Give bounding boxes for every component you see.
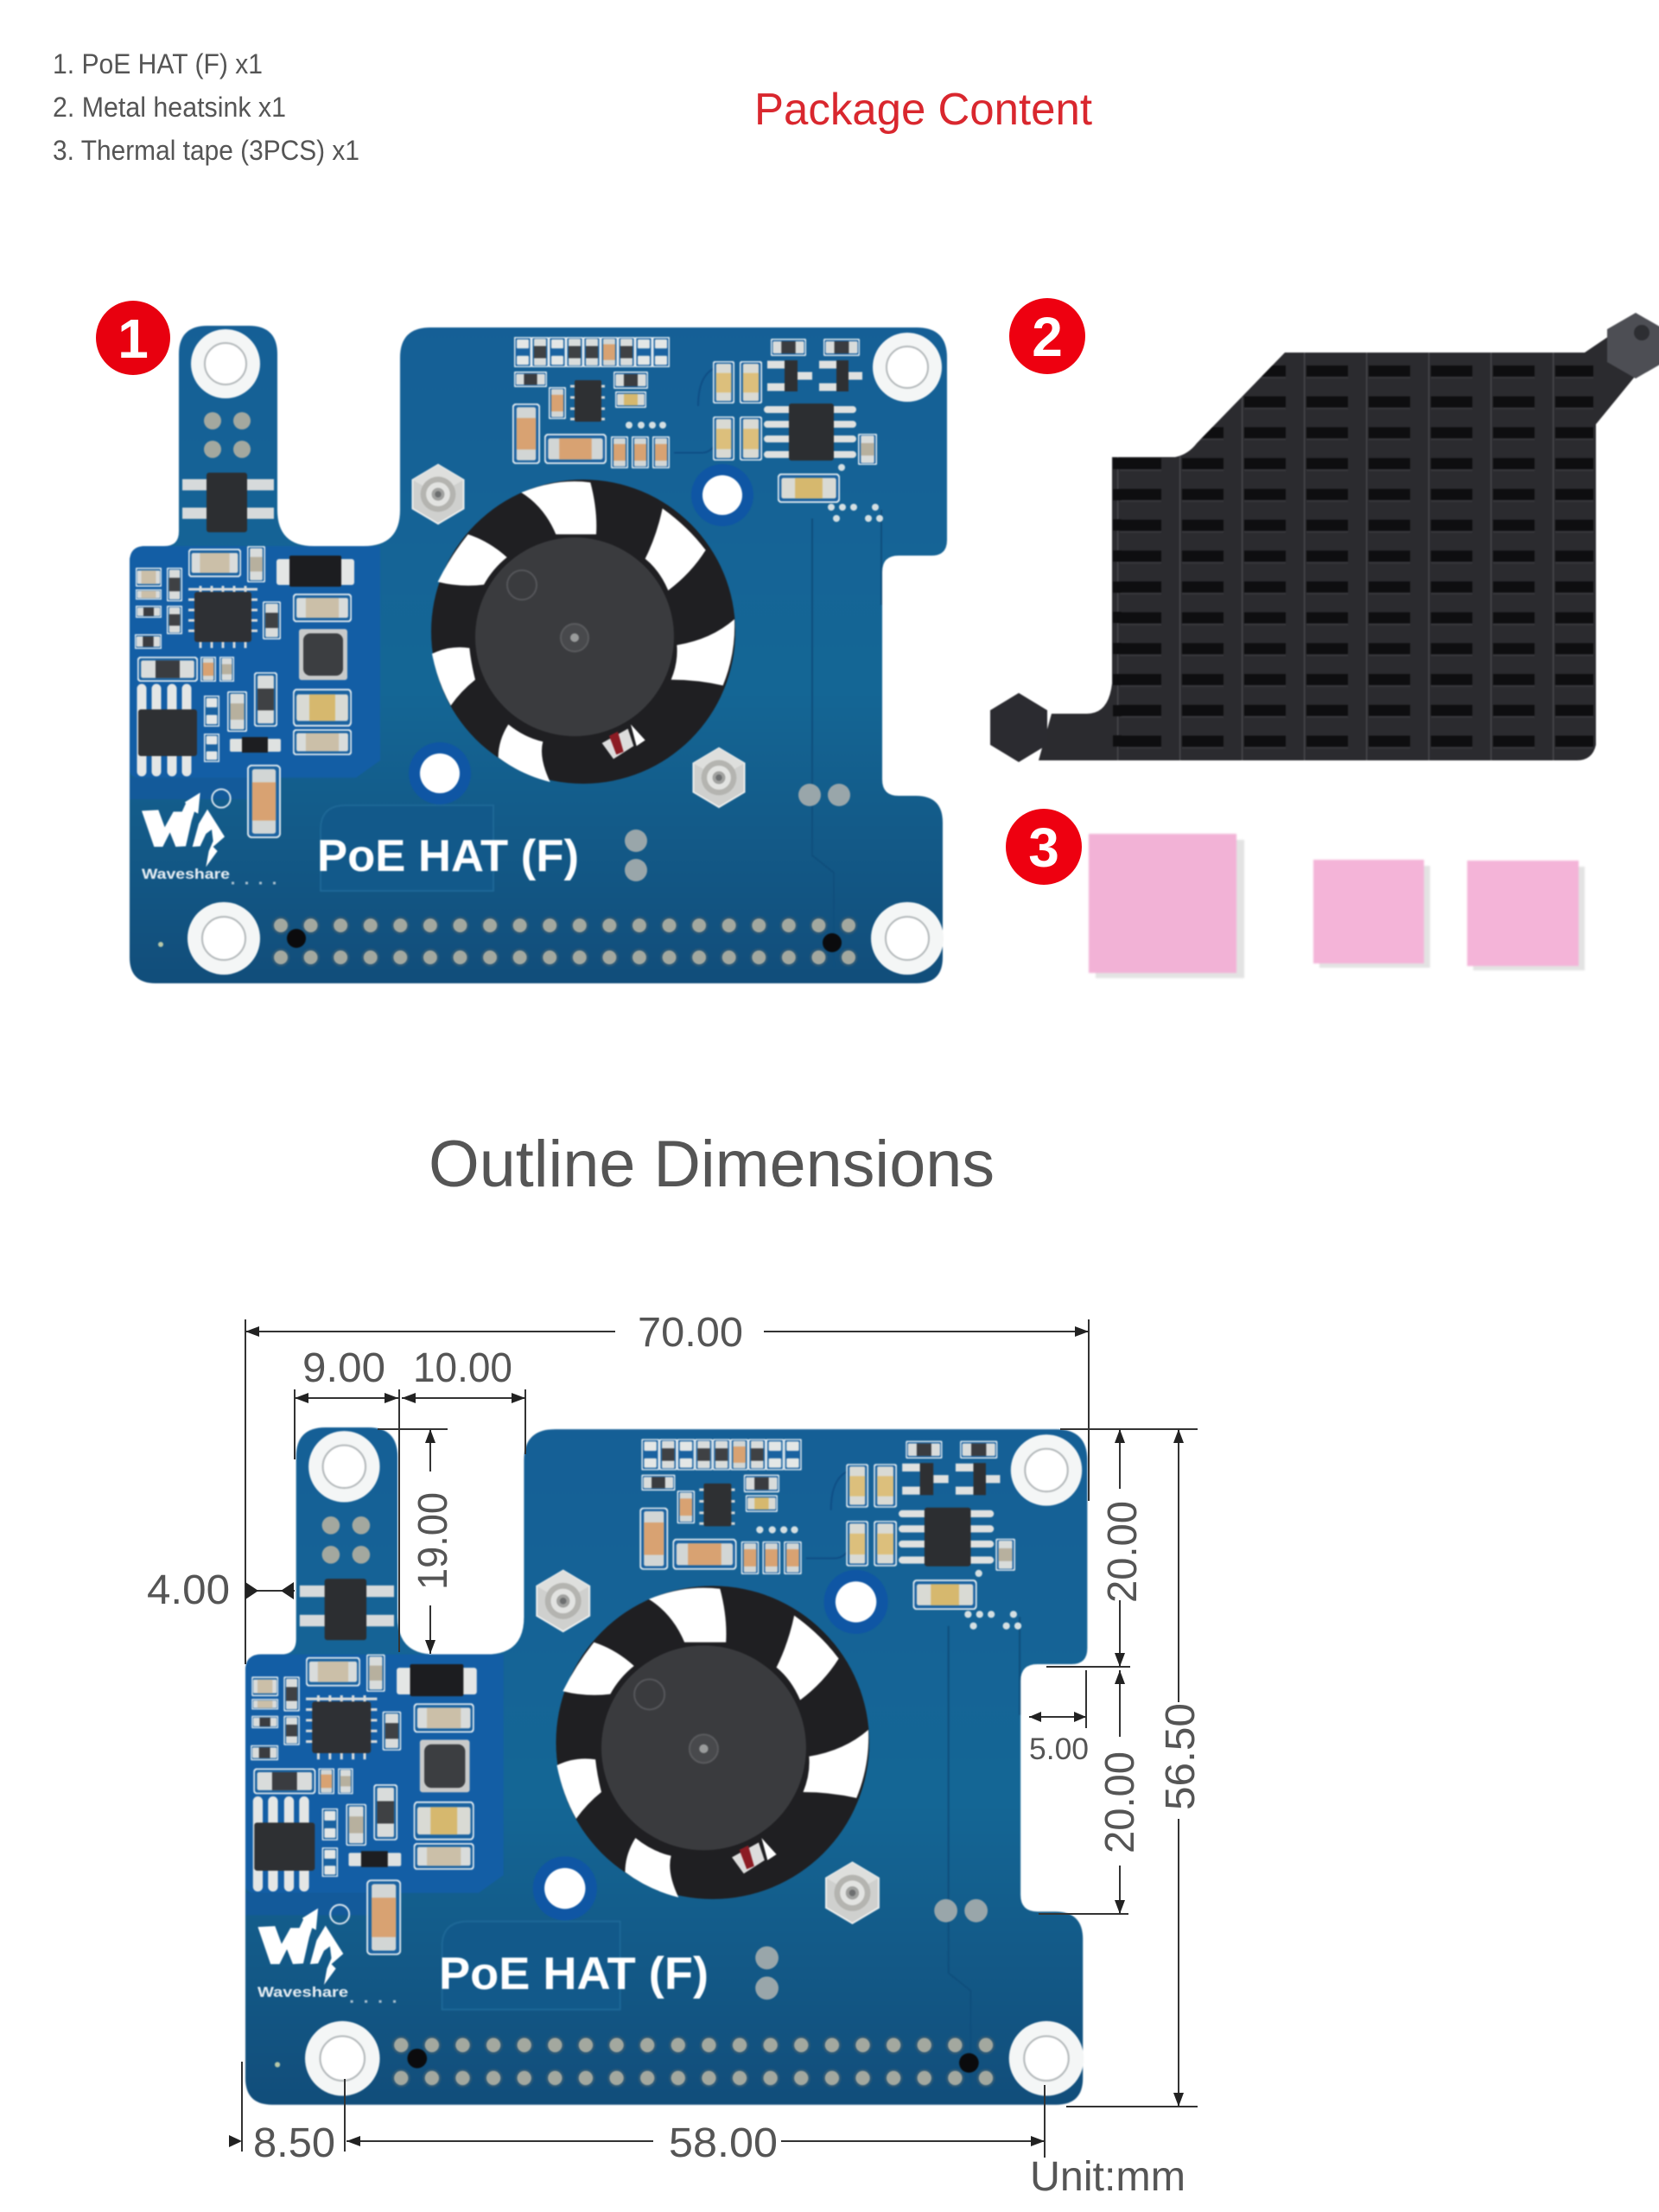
dimension: upper 20.00 [1046,1429,1198,1667]
heading: Outline Dimensions: Outline Dimensions [429,1128,995,1201]
dimension: upper 20.00: 20.00 [1100,1501,1146,1603]
unit note: Unit:mm [1030,2154,1185,2200]
dimension: lower 20.00 [1039,1670,1143,1914]
dimension: width 70.00: 70.00 [638,1310,743,1356]
contents list: 1. PoE HAT (F) x1 [53,48,263,79]
panel: dimensioned board photo [245,1427,1087,2105]
dimension: width 70.00 [245,1310,1089,1664]
dimension: height 56.50 [1066,1429,1204,2107]
badge 2: 2 [1032,306,1063,368]
dimension: height 56.50: 56.50 [1158,1703,1204,1810]
dimension: 19.00: 19.00 [410,1492,456,1590]
panel: metal heatsink [990,313,1659,762]
panel: PoE HAT board photo: Waveshare [142,866,230,882]
dimension: 19.00 [378,1429,456,1654]
dimension: lower 20.00: 20.00 [1097,1751,1143,1853]
heading: Package Content: Package Content [754,85,1093,135]
dimension: 4.00: 4.00 [147,1567,230,1613]
badge 3: 3 [1028,817,1059,879]
badge 2 [1009,298,1085,374]
dimension: 4.00 [147,1567,295,1613]
contents list: 2. Metal heatsink x1 [53,92,286,123]
dimension: 9.00 [295,1345,399,1652]
panel: thermal tape pads [1089,834,1585,978]
dimension: 58.00: 58.00 [669,2120,778,2166]
panel: PoE HAT board photo [130,326,947,983]
dimension: 8.50: 8.50 [253,2120,335,2166]
dimension: 10.00 [402,1345,525,1454]
dimension: 10.00: 10.00 [413,1345,512,1391]
panel: PoE HAT board photo: PoE HAT (F) [317,831,579,881]
badge 1 [96,301,170,375]
dimension: 5.00 [1029,1670,1089,1766]
dimension: 8.50 [229,2062,345,2166]
dimension: 58.00 [346,2085,1045,2166]
badge 1: 1 [118,308,149,370]
dimension: 9.00: 9.00 [302,1345,385,1391]
panel: dimensioned board photo: PoE HAT (F) [439,1948,709,1999]
panel: dimensioned board photo: Waveshare [257,1984,348,2000]
contents list: 3. Thermal tape (3PCS) x1 [53,135,359,166]
contents list [53,48,359,166]
badge 3 [1006,809,1082,885]
dimension lines and labels [147,1310,1204,2200]
dimension: 5.00: 5.00 [1029,1732,1089,1766]
